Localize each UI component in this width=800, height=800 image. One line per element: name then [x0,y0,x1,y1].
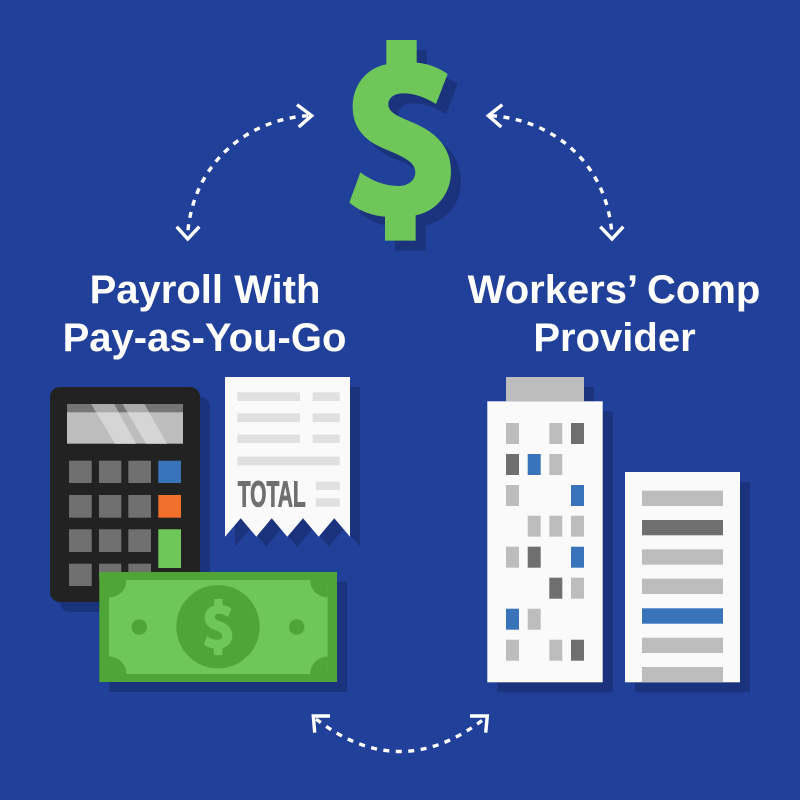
icon: tall office building [487,377,613,692]
icon: calculator [50,387,210,612]
heading: workers' comp provider: Workers’ Comp [468,268,760,312]
heading: payroll with pay-as-you-go: Pay-as-You-Go [63,316,346,360]
arrow: payroll to workers' comp [313,716,487,752]
dollar symbol on bill [204,599,232,655]
building windows [506,423,584,661]
calculator keys [69,461,181,586]
icon: large green dollar sign [349,40,461,251]
arrow: dollar to payroll [177,105,312,239]
icon: receipt [225,377,360,547]
heading: workers' comp provider [468,268,760,360]
heading: payroll with pay-as-you-go [63,268,346,360]
icon: short office building [625,472,750,692]
receipt line items [237,392,340,507]
calculator screen [67,404,183,444]
heading: workers' comp provider: Provider [533,316,696,360]
icon: dollar bill [99,572,347,692]
receipt total label: TOTAL [238,473,306,514]
arrow: dollar to workers' comp [488,105,623,239]
heading: payroll with pay-as-you-go: Payroll With [90,268,320,312]
building window bands [642,491,723,682]
